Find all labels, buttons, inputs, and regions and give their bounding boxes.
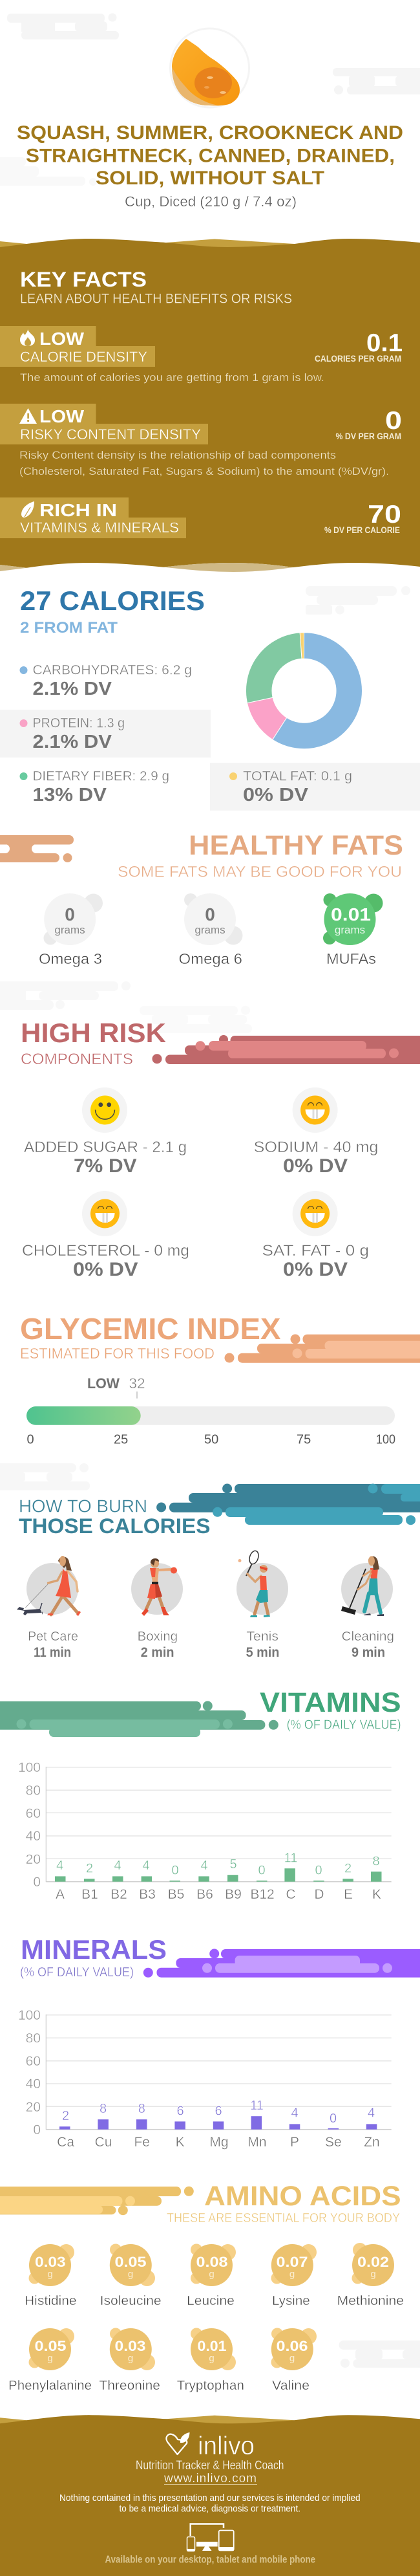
bar chart: vitamins: B3 bbox=[139, 1887, 156, 1902]
bar chart: vitamins: B6 bbox=[196, 1887, 213, 1902]
bubble: isoleucine: 0.05 bbox=[115, 2254, 146, 2270]
banner shape bbox=[152, 1035, 420, 1064]
icon: grin bbox=[300, 1199, 330, 1228]
item: sodium: SODIUM - 40 mg bbox=[254, 1139, 378, 1156]
bar chart: vitamins: 8 bbox=[372, 1854, 380, 1868]
item: saturated fat: SAT. FAT - 0 g bbox=[262, 1242, 369, 1260]
heading: calories: 27 CALORIES bbox=[20, 585, 205, 616]
icon: leaf bbox=[21, 501, 34, 518]
bubble: isoleucine bbox=[100, 2243, 162, 2308]
activity: boxing: 2 min bbox=[141, 1645, 174, 1660]
panel: glycemic index bbox=[20, 1312, 420, 1447]
bubble: phenylalanine: g bbox=[47, 2353, 53, 2364]
bubble: MUFAs: grams bbox=[335, 924, 365, 936]
icon: grin bbox=[90, 1199, 120, 1228]
fact: vitamins and minerals: % DV PER CALORIE bbox=[324, 525, 400, 535]
activity: tennis: Tenis bbox=[246, 1630, 278, 1644]
panel: burn calories bbox=[17, 1484, 420, 1660]
bubble: phenylalanine bbox=[8, 2328, 92, 2393]
bar chart: minerals: 8 bbox=[100, 2102, 107, 2116]
bubble: leucine bbox=[187, 2243, 236, 2308]
bubble: histidine: g bbox=[47, 2269, 53, 2280]
legend: dietary fiber: 13% DV bbox=[32, 785, 107, 805]
gauge: glycemic value: 32 bbox=[129, 1375, 145, 1392]
legend: dietary fiber: DIETARY FIBER: 2.9 g bbox=[32, 769, 169, 784]
bubble: histidine bbox=[25, 2244, 77, 2308]
bubble: leucine: Leucine bbox=[187, 2293, 235, 2308]
fact: vitamins and minerals: 70 bbox=[368, 501, 401, 529]
activity: pet care: Pet Care bbox=[28, 1630, 78, 1644]
bubble: histidine: Histidine bbox=[25, 2293, 77, 2308]
item: sodium bbox=[254, 1087, 378, 1177]
legend: carbohydrates: 2.1% DV bbox=[32, 679, 112, 699]
panel: high risk bbox=[21, 1018, 420, 1280]
bar chart: vitamins: 0 bbox=[171, 1864, 179, 1878]
fact: calorie density: CALORIE DENSITY bbox=[20, 349, 147, 365]
bubble: isoleucine: Isoleucine bbox=[100, 2293, 162, 2308]
bar chart: vitamins: E bbox=[344, 1887, 353, 1902]
bubble: histidine: 0.03 bbox=[35, 2254, 66, 2270]
bar chart: minerals: 0 bbox=[330, 2112, 337, 2126]
activity: cleaning: Cleaning bbox=[342, 1630, 394, 1644]
heading: key facts: KEY FACTS bbox=[20, 268, 147, 291]
logo: inlivo: inlivo bbox=[198, 2432, 255, 2460]
icon: devices bbox=[187, 2524, 234, 2551]
donut chart bbox=[246, 633, 362, 749]
bubble: threonine: g bbox=[128, 2353, 133, 2364]
subheading: LEARN ABOUT HEALTH BENEFITS OR RISKS bbox=[20, 292, 292, 307]
tagline: Nutrition Tracker & Health Coach bbox=[136, 2459, 284, 2472]
bar chart: vitamins: B2 bbox=[110, 1887, 127, 1902]
item: saturated fat: 0% DV bbox=[283, 1259, 348, 1280]
subheading: from fat: 2 FROM FAT bbox=[20, 619, 118, 637]
availability note: Available on your desktop, tablet and mobile phone bbox=[105, 2555, 315, 2566]
activity: tennis: 5 min bbox=[246, 1645, 279, 1660]
bar chart: vitamins: 80 bbox=[26, 1783, 41, 1798]
bar chart: vitamins: A bbox=[56, 1887, 65, 1902]
bubble: MUFAs bbox=[323, 893, 383, 967]
legend: carbohydrates bbox=[19, 663, 192, 699]
bubble: valine: Valine bbox=[272, 2378, 310, 2393]
icon: grin bbox=[300, 1096, 330, 1124]
activity: tennis bbox=[236, 1550, 288, 1660]
legend: protein: 2.1% DV bbox=[32, 732, 112, 752]
heading: high risk: HIGH RISK bbox=[21, 1018, 166, 1048]
icon: woman walking dog bbox=[17, 1556, 81, 1616]
bubble: MUFAs: 0.01 bbox=[331, 904, 371, 924]
panel: amino acids bbox=[0, 2181, 404, 2393]
banner shape bbox=[0, 1701, 278, 1737]
disclaimer: Nothing contained in this presentation and our services is intended or implied bbox=[59, 2493, 361, 2504]
fact: calorie density: The amount of calories you are getting from 1 gram is low. bbox=[20, 371, 324, 384]
bar chart: minerals: 11 bbox=[250, 2099, 264, 2113]
activity: cleaning bbox=[341, 1556, 394, 1660]
disclaimer: to be a medical advice, diagnosis or treatment. bbox=[119, 2504, 300, 2515]
bar chart: minerals: Fe bbox=[134, 2135, 150, 2150]
bar chart: minerals: Zn bbox=[364, 2135, 380, 2150]
bar chart: minerals: 20 bbox=[26, 2100, 41, 2115]
subheading: (% OF DAILY VALUE) bbox=[287, 1718, 401, 1732]
fact: risky content density: Risky Content density is the relationship of bad components bbox=[19, 449, 336, 461]
bar chart: vitamins: K bbox=[372, 1887, 381, 1902]
panel: key facts bbox=[0, 239, 420, 568]
gauge: glycemic value: 50 bbox=[204, 1433, 218, 1447]
title: STRAIGHTNECK, CANNED, DRAINED, bbox=[26, 145, 395, 167]
panel: vitamins bbox=[0, 1687, 401, 1902]
title bbox=[17, 122, 403, 189]
bar chart: minerals: Se bbox=[325, 2135, 342, 2150]
item: cholesterol: 0% DV bbox=[73, 1259, 138, 1280]
bar chart: vitamins: 40 bbox=[26, 1829, 41, 1844]
activity: pet care: 11 min bbox=[34, 1645, 71, 1660]
bar chart: minerals: Mn bbox=[247, 2135, 267, 2150]
bubble: valine bbox=[271, 2328, 317, 2393]
bubble: tryptophan: Tryptophan bbox=[177, 2378, 244, 2393]
bubble: omega 3: 0 bbox=[65, 904, 75, 924]
activity: boxing: Boxing bbox=[138, 1630, 178, 1644]
legend: dietary fiber bbox=[19, 769, 169, 805]
fact: risky content density bbox=[0, 404, 402, 477]
bar chart: vitamins: 100 bbox=[18, 1760, 41, 1775]
banner shape bbox=[156, 1484, 420, 1525]
activity: cleaning: 9 min bbox=[352, 1645, 385, 1660]
bar chart: vitamins: 0 bbox=[33, 1875, 41, 1890]
bar chart: minerals: 6 bbox=[176, 2104, 184, 2118]
bubble: methionine bbox=[337, 2243, 404, 2308]
legend: total fat: 0% DV bbox=[243, 785, 309, 805]
heading: glycemic index: GLYCEMIC INDEX bbox=[20, 1312, 281, 1346]
disclaimer bbox=[59, 2493, 361, 2515]
item: sodium: 0% DV bbox=[283, 1155, 348, 1177]
bubble: valine: g bbox=[289, 2353, 295, 2364]
item: cholesterol bbox=[22, 1191, 189, 1280]
bar chart: vitamins: 4 bbox=[200, 1859, 208, 1873]
serving size: Cup, Diced (210 g / 7.4 oz) bbox=[125, 193, 297, 210]
fact: risky content density: 0 bbox=[385, 407, 402, 435]
bubble: MUFAs: MUFAs bbox=[326, 950, 376, 967]
bubble: lysine bbox=[271, 2244, 317, 2308]
bar chart: minerals bbox=[18, 2008, 392, 2150]
bar chart: vitamins: 20 bbox=[26, 1852, 41, 1867]
bar chart: vitamins: B12 bbox=[250, 1887, 275, 1902]
item: added sugar bbox=[24, 1087, 187, 1177]
legend: carbohydrates: CARBOHYDRATES: 6.2 g bbox=[32, 663, 192, 678]
bar chart: minerals: Mg bbox=[209, 2135, 229, 2150]
bar chart: minerals: Ca bbox=[57, 2135, 74, 2150]
website link: www.inlivo.com bbox=[163, 2472, 257, 2485]
bubble: tryptophan bbox=[177, 2328, 244, 2393]
bar chart: vitamins: B5 bbox=[168, 1887, 184, 1902]
bar chart: vitamins bbox=[18, 1760, 392, 1902]
panel: minerals bbox=[18, 1934, 420, 2150]
icon: tennis player bbox=[238, 1550, 270, 1617]
bar chart: minerals: K bbox=[176, 2135, 185, 2150]
bubble: omega 3: Omega 3 bbox=[39, 950, 102, 967]
bar chart: minerals: 100 bbox=[18, 2008, 41, 2023]
bar chart: vitamins: 2 bbox=[86, 1861, 93, 1875]
legend: total fat: TOTAL FAT: 0.1 g bbox=[243, 769, 352, 784]
fact: calorie density bbox=[0, 326, 403, 384]
bubble: tryptophan: 0.01 bbox=[198, 2338, 226, 2354]
bar chart: minerals: 2 bbox=[62, 2109, 69, 2123]
bubble: omega 3: grams bbox=[54, 924, 85, 936]
bar chart: vitamins: 2 bbox=[344, 1861, 352, 1875]
bubble: leucine: 0.08 bbox=[196, 2254, 227, 2270]
banner shape bbox=[0, 2187, 194, 2215]
item: added sugar: 7% DV bbox=[74, 1155, 137, 1177]
heading: how to burn: HOW TO BURN bbox=[19, 1496, 147, 1516]
bar chart: vitamins: 4 bbox=[142, 1859, 150, 1873]
bubble: isoleucine: g bbox=[128, 2269, 133, 2280]
panel: footer bbox=[0, 2415, 420, 2576]
bubble: threonine: Threonine bbox=[99, 2378, 160, 2393]
bar chart: vitamins: 4 bbox=[114, 1859, 121, 1873]
heading: those calories: THOSE CALORIES bbox=[19, 1514, 211, 1538]
bar chart: minerals: 60 bbox=[26, 2054, 41, 2069]
bubble: lysine: Lysine bbox=[272, 2293, 310, 2308]
icon: person sweeping bbox=[341, 1556, 384, 1616]
subheading: ESTIMATED FOR THIS FOOD bbox=[20, 1345, 215, 1362]
item: saturated fat bbox=[262, 1191, 369, 1280]
banner shape bbox=[0, 835, 74, 862]
bubble: threonine: 0.03 bbox=[115, 2338, 146, 2354]
gauge: glycemic value bbox=[26, 1375, 395, 1447]
bar chart: vitamins: B9 bbox=[225, 1887, 242, 1902]
bar chart: minerals: 40 bbox=[26, 2077, 41, 2091]
bubble: omega 6 bbox=[178, 893, 243, 967]
gauge: glycemic value: 75 bbox=[297, 1433, 311, 1447]
gauge: glycemic value: 0 bbox=[27, 1433, 34, 1447]
food image: squash bbox=[171, 28, 249, 107]
bar chart: minerals: 80 bbox=[26, 2031, 41, 2046]
bar chart: vitamins: 5 bbox=[229, 1857, 237, 1872]
fact: risky content density: % DV PER GRAM bbox=[336, 431, 401, 441]
gauge: glycemic value: 100 bbox=[376, 1433, 395, 1447]
bubble: lysine: 0.07 bbox=[277, 2254, 308, 2270]
icon: smile bbox=[90, 1096, 120, 1124]
item: added sugar: ADDED SUGAR - 2.1 g bbox=[24, 1139, 187, 1156]
bar chart: minerals: 4 bbox=[291, 2106, 299, 2121]
bar chart: minerals: 6 bbox=[215, 2104, 222, 2118]
bubble: valine: 0.06 bbox=[277, 2338, 308, 2354]
icon: flame bbox=[20, 329, 35, 346]
banner shape bbox=[225, 1334, 420, 1363]
heading: healthy fats: HEALTHY FATS bbox=[189, 830, 403, 861]
bar chart: minerals: 0 bbox=[33, 2123, 41, 2137]
bar chart: vitamins: 60 bbox=[26, 1806, 41, 1821]
logo: inlivo bbox=[167, 2432, 255, 2460]
bubble: omega 3 bbox=[39, 893, 103, 967]
bar chart: vitamins: B1 bbox=[81, 1887, 98, 1902]
panel: calories bbox=[0, 585, 420, 811]
bar chart: minerals: 8 bbox=[138, 2102, 145, 2116]
bar chart: vitamins: 0 bbox=[315, 1864, 322, 1878]
subheading: (% OF DAILY VALUE) bbox=[20, 1965, 134, 1980]
fact: vitamins and minerals: VITAMINS & MINERALS bbox=[20, 519, 179, 536]
icon: boxer bbox=[142, 1558, 177, 1616]
fact: calorie density: LOW bbox=[39, 329, 85, 349]
bar chart: vitamins: 4 bbox=[56, 1859, 63, 1873]
bar chart: vitamins: 11 bbox=[284, 1851, 297, 1865]
bubble: phenylalanine: 0.05 bbox=[35, 2338, 66, 2354]
bubble: tryptophan: g bbox=[209, 2353, 215, 2364]
gauge: glycemic value: LOW bbox=[87, 1375, 120, 1392]
bar chart: minerals: Cu bbox=[95, 2135, 112, 2150]
bar chart: vitamins: C bbox=[286, 1887, 296, 1902]
activity: pet care bbox=[17, 1556, 81, 1660]
fact: risky content density: LOW bbox=[39, 406, 85, 426]
title: SOLID, WITHOUT SALT bbox=[96, 168, 324, 189]
fact: calorie density: 0.1 bbox=[366, 329, 403, 357]
bar chart: vitamins: D bbox=[314, 1887, 324, 1902]
item: cholesterol: CHOLESTEROL - 0 mg bbox=[22, 1242, 189, 1260]
bubble: leucine: g bbox=[209, 2269, 215, 2280]
subheading: COMPONENTS bbox=[21, 1051, 133, 1068]
legend: protein bbox=[0, 710, 211, 758]
activity: boxing bbox=[131, 1558, 183, 1660]
heading: minerals: MINERALS bbox=[21, 1934, 167, 1965]
bubble: omega 6: grams bbox=[194, 924, 226, 936]
bubble: lysine: g bbox=[289, 2269, 295, 2280]
gauge: glycemic value: 25 bbox=[114, 1433, 128, 1447]
panel: healthy fats bbox=[0, 830, 403, 967]
fact: vitamins and minerals: RICH IN bbox=[39, 500, 117, 520]
title: SQUASH, SUMMER, CROOKNECK AND bbox=[17, 122, 403, 144]
legend: protein: PROTEIN: 1.3 g bbox=[32, 716, 125, 731]
fact: risky content density: RISKY CONTENT DENSITY bbox=[20, 426, 201, 442]
bubble: methionine: Methionine bbox=[337, 2293, 404, 2308]
heading: amino acids: AMINO ACIDS bbox=[204, 2181, 401, 2212]
bubble: omega 6: Omega 6 bbox=[178, 950, 242, 967]
heading: vitamins: VITAMINS bbox=[260, 1687, 401, 1718]
icon: warning triangle bbox=[19, 408, 37, 424]
banner shape bbox=[143, 1948, 420, 1978]
bubble: methionine: g bbox=[370, 2269, 376, 2280]
fact: calorie density: CALORIES PER GRAM bbox=[315, 354, 401, 364]
bubble: threonine bbox=[99, 2328, 160, 2393]
legend: total fat bbox=[210, 763, 420, 811]
bar chart: vitamins: 0 bbox=[258, 1864, 266, 1878]
bubble: omega 6: 0 bbox=[205, 904, 215, 924]
bar chart: minerals: P bbox=[290, 2135, 299, 2150]
subheading: SOME FATS MAY BE GOOD FOR YOU bbox=[118, 864, 402, 881]
bar chart: minerals: 4 bbox=[368, 2106, 375, 2121]
fact: vitamins and minerals bbox=[0, 497, 401, 538]
bubble: phenylalanine: Phenylalanine bbox=[8, 2378, 92, 2393]
fact: risky content density: (Cholesterol, Saturated Fat, Sugars & Sodium) to the amount (%DV/gr). bbox=[19, 465, 389, 477]
bubble: methionine: 0.02 bbox=[357, 2254, 389, 2270]
subheading: THESE ARE ESSENTIAL FOR YOUR BODY bbox=[167, 2211, 400, 2225]
